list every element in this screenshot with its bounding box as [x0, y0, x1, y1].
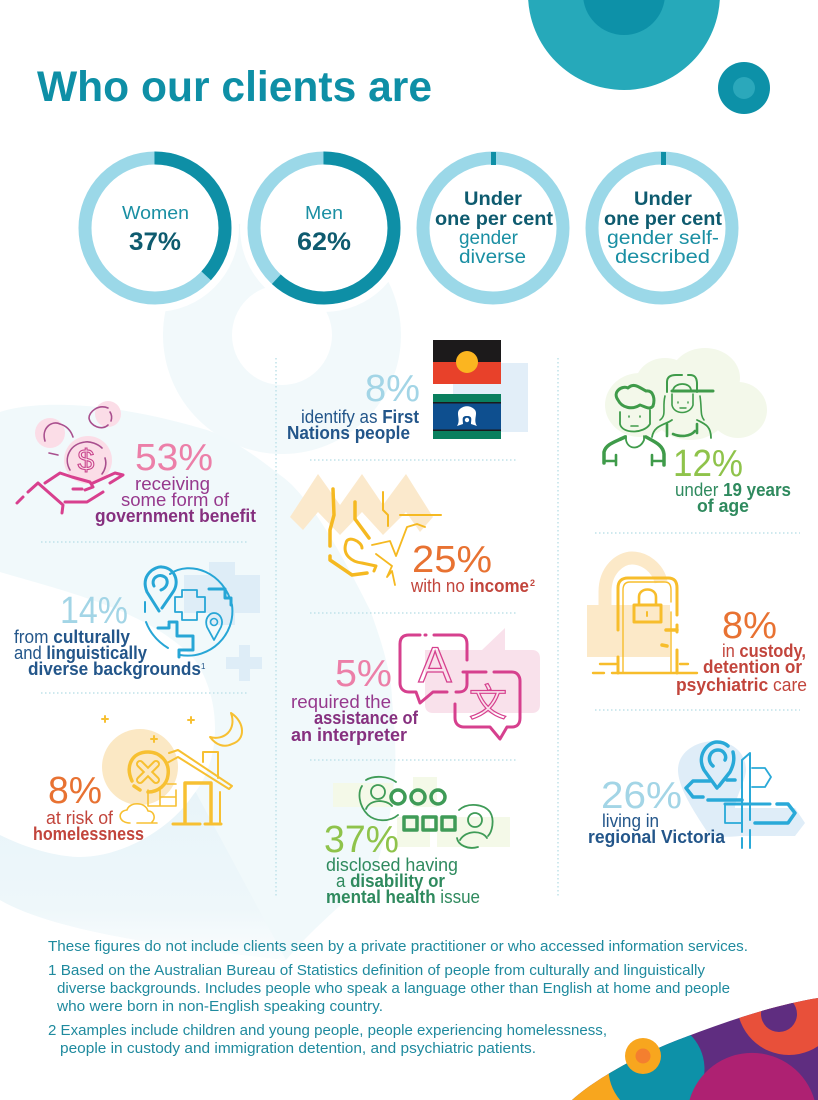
icon: translation speech bubbles — [400, 628, 540, 739]
stat: First Nations: 8% — [365, 368, 420, 410]
stat: no income: 2 — [530, 578, 535, 588]
stat: custody, detention or psychiatric care: detention or — [703, 657, 802, 677]
icon: Aboriginal flag — [433, 340, 501, 384]
stat: regional Victoria: regional Victoria — [588, 827, 726, 847]
ring: gender self-described: gender self- — [607, 228, 719, 249]
stat: government benefit: government benefit — [95, 506, 256, 526]
footnotes: people in custody and immigration detention, and psychiatric patients. — [60, 1040, 536, 1057]
stat: regional Victoria: living in — [602, 811, 659, 831]
ring: gender diverse: diverse — [459, 247, 526, 268]
icon: map pin and signpost — [678, 741, 805, 848]
ring: gender diverse: Under — [464, 189, 523, 210]
stat: culturally and linguistically diverse: diverse backgrounds — [28, 659, 201, 679]
stat: disability or mental health: disclosed having — [326, 855, 458, 875]
stat: First Nations: identify as First — [301, 407, 419, 427]
ring: gender self-described: one per cent — [604, 209, 723, 230]
stat: First Nations — [287, 340, 528, 443]
icon: translation speech bubbles: 文 — [469, 672, 507, 727]
stat: under 19 years: of age — [697, 496, 749, 516]
ring: men: 62% — [297, 228, 351, 256]
stat: at risk of homelessness: at risk of — [46, 808, 114, 828]
stat: disability or mental health: mental health issue — [326, 887, 480, 907]
stat: culturally and linguistically diverse — [14, 562, 262, 681]
footnotes: diverse backgrounds. Includes people who speak a language other than English at home and people — [57, 980, 730, 997]
ring: gender diverse — [423, 152, 563, 298]
stat: custody, detention or psychiatric care — [587, 558, 807, 695]
ring: gender self-described: described — [615, 247, 710, 268]
decorative swoosh bottom right — [572, 998, 818, 1100]
stat: disability or mental health — [324, 777, 510, 907]
stat: under 19 years — [604, 348, 791, 516]
stat: no income: 25% — [412, 539, 492, 581]
ring: gender self-described — [592, 152, 732, 298]
decorative circles top — [528, 0, 770, 114]
ring: women: Women — [122, 203, 189, 223]
stat: custody, detention or psychiatric care: 8% — [722, 605, 777, 647]
ring: gender diverse: gender — [459, 228, 519, 249]
icon: broken hands with lightning — [290, 474, 441, 585]
ring: men: Men — [305, 203, 343, 223]
ring: women — [85, 158, 225, 298]
icon: hand with coins — [17, 401, 123, 513]
stat: First Nations: Nations people — [287, 423, 410, 443]
ring: women: 37% — [129, 228, 181, 256]
stat: government benefit: 53% — [135, 437, 213, 479]
stat: interpreter: 5% — [335, 653, 392, 695]
stat: under 19 years: under 19 years — [675, 480, 791, 500]
stat: interpreter: required the — [291, 692, 391, 712]
stat: regional Victoria — [588, 741, 805, 848]
stat: government benefit: receiving — [135, 474, 210, 494]
footnotes — [48, 938, 748, 1057]
stat: disability or mental health: a disability or — [336, 871, 445, 891]
icon: Torres Strait Islander flag — [433, 394, 501, 439]
ring: gender diverse: one per cent — [435, 209, 554, 230]
stat: interpreter: assistance of — [314, 708, 419, 728]
stat: interpreter — [291, 628, 540, 745]
stat: culturally and linguistically diverse: and linguistically — [14, 643, 147, 663]
stat: interpreter: an interpreter — [291, 725, 407, 745]
stat: culturally and linguistically diverse: from culturally — [14, 627, 130, 647]
footnotes: These figures do not include clients seen by a private practitioner or who accessed information services. — [48, 938, 748, 955]
ring: gender self-described: Under — [634, 189, 693, 210]
stat: no income: with no income — [410, 576, 529, 596]
footnotes: who were born in non-English speaking country. — [56, 998, 383, 1015]
panel: gender rings — [85, 152, 732, 298]
icon: translation speech bubbles: A — [418, 637, 452, 693]
stat: regional Victoria: 26% — [601, 775, 682, 817]
icon: house with moon — [102, 713, 242, 824]
footnotes: 1 Based on the Australian Bureau of Statistics definition of people from culturally and linguistically — [48, 962, 706, 979]
icon: locked door — [587, 558, 697, 673]
stat: culturally and linguistically diverse: 14% — [60, 590, 128, 632]
icon: people with circles and squares — [333, 777, 510, 848]
icon: two young people — [604, 348, 767, 465]
stat: at risk of homelessness — [33, 713, 242, 844]
stat: government benefit: some form of — [121, 490, 230, 510]
stat: government benefit — [17, 401, 256, 526]
stat: at risk of homelessness: homelessness — [33, 824, 144, 844]
stat: culturally and linguistically diverse: 1 — [201, 662, 206, 671]
stat: at risk of homelessness: 8% — [48, 770, 102, 812]
footnotes: 2 Examples include children and young people, people experiencing homelessness, — [48, 1022, 607, 1039]
stat: under 19 years: 12% — [673, 443, 743, 485]
stat: custody, detention or psychiatric care: psychiatric care — [676, 675, 807, 695]
title: Who our clients are — [37, 63, 432, 111]
background pale shapes — [0, 144, 577, 960]
icon: globe with pins and crosses — [145, 562, 262, 681]
icon: hand with coins: $ — [78, 444, 95, 477]
stat: disability or mental health: 37% — [324, 819, 399, 861]
stat: custody, detention or psychiatric care: in custody, — [722, 641, 806, 661]
ring: men — [254, 158, 394, 298]
stat: no income — [290, 474, 535, 596]
